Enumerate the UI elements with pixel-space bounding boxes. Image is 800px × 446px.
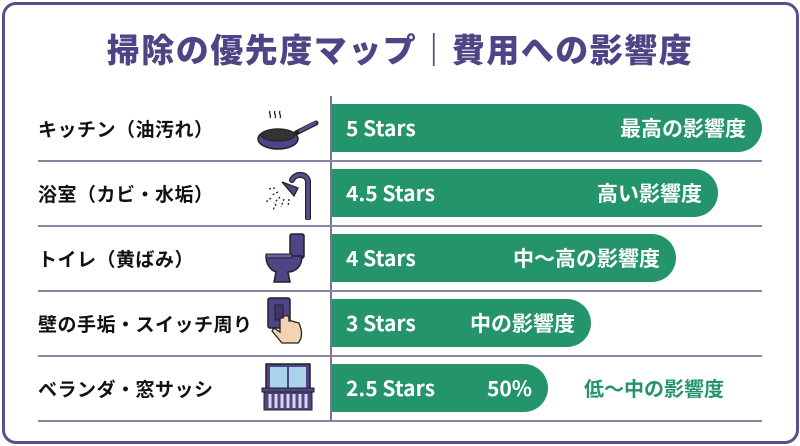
divider column line: [330, 96, 332, 421]
bar: toilet: [332, 234, 676, 282]
bar: kitchen: [332, 104, 762, 152]
bar: veranda: 50%: [487, 373, 532, 403]
row 1 label: キッチン（油汚れ）: [38, 115, 214, 142]
bar: wall switch: 中の影響度: [470, 308, 575, 338]
icon: switch with hand: [267, 297, 302, 344]
title: 掃除の優先度マップ｜費用への影響度: [107, 24, 693, 72]
icon: shower: [266, 172, 311, 220]
bar: bathroom: [332, 169, 718, 217]
icon: toilet: [265, 233, 305, 283]
row 4 label: 壁の手垢・スイッチ周り: [38, 310, 253, 337]
bar: wall switch: 3 Stars: [346, 308, 416, 338]
bar: toilet: 4 Stars: [346, 243, 416, 273]
bar: veranda: 2.5 Stars: [346, 373, 435, 403]
bar: wall switch: [332, 299, 591, 347]
bar: kitchen: 最高の影響度: [620, 113, 746, 143]
row 2 label: 浴室（カビ・水垢）: [38, 180, 214, 207]
row 5 label: ベランダ・窓サッシ: [38, 375, 214, 402]
bar: bathroom: 4.5 Stars: [346, 178, 435, 208]
outside label: 低〜中の影響度: [584, 373, 724, 402]
icon: frying pan: [257, 110, 318, 150]
bar: kitchen: 5 Stars: [346, 113, 416, 143]
bar: veranda: [332, 364, 548, 412]
icon: window balcony: [262, 363, 314, 410]
bar: bathroom: 高い影響度: [597, 178, 702, 208]
bar: toilet: 中〜高の影響度: [513, 243, 660, 273]
row 3 label: トイレ（黄ばみ）: [38, 245, 194, 272]
